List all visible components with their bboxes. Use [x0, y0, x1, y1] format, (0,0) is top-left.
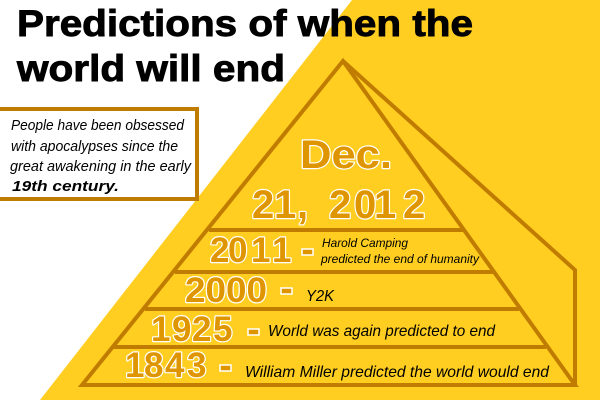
pyramid tier: 2011: predicted the end of humanity	[320, 252, 480, 266]
pyramid tier: 1925: World was again predicted to end	[268, 323, 496, 340]
callout: intro text box: 19th century.	[12, 178, 119, 195]
pyramid tier: 1843: 1843	[125, 346, 206, 385]
pyramid tier: December 21, 2012: 21, 2012	[252, 183, 425, 227]
pyramid tier: 2011	[210, 231, 480, 270]
pyramid tier: 1843	[125, 346, 550, 385]
pyramid outline	[82, 61, 575, 385]
pyramid tier: 2011: Harold Camping	[322, 236, 408, 250]
pyramid tier: December 21, 2012: Dec.	[300, 133, 392, 177]
pyramid tier: 2011: 2011	[210, 231, 291, 270]
callout: intro text box: with apocalypses since the	[11, 138, 178, 155]
pyramid tier: December 21, 2012	[252, 133, 425, 227]
title	[16, 3, 473, 89]
pyramid tier: 1925	[151, 310, 496, 349]
pyramid tier: 2000	[185, 271, 335, 310]
callout: intro text box: great awakening in the early	[10, 158, 192, 175]
pyramid tier: 1843: William Miller predicted the world would end	[245, 364, 550, 381]
title: world will end	[16, 48, 285, 89]
callout: intro text box: People have been obsessed	[11, 117, 185, 134]
title: Predictions of when the	[17, 3, 473, 44]
callout: intro text box	[0, 109, 197, 199]
pyramid tier: 2000: Y2K	[306, 288, 335, 305]
pyramid tier: 2000: 2000	[185, 271, 267, 310]
pyramid tier: 1925: 1925	[151, 310, 232, 349]
